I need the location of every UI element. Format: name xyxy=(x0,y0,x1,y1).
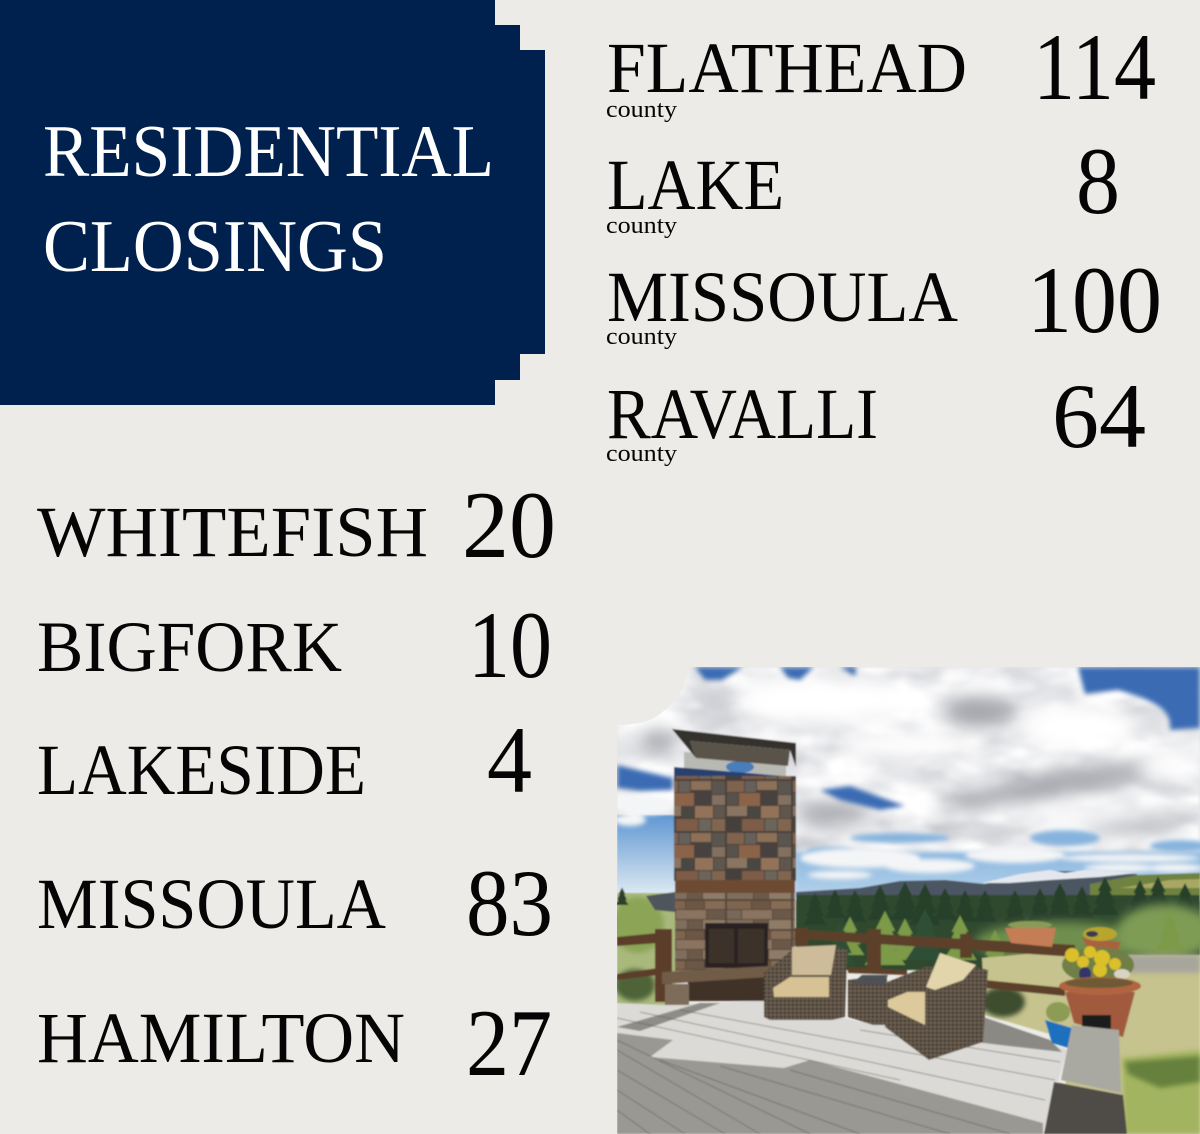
heading: residential closings: RESIDENTIAL xyxy=(43,111,494,193)
row: Missoula: MISSOULA xyxy=(37,864,386,944)
row: Lake county xyxy=(606,128,1120,239)
flower pot on railing xyxy=(1059,946,1141,1037)
panel: title block xyxy=(0,0,545,405)
row: Missoula: 83 xyxy=(466,850,553,956)
panel: county closings list xyxy=(606,14,1162,467)
row: Lake county: LAKE xyxy=(607,145,784,225)
stepped navy panel xyxy=(0,0,545,405)
row: Missoula xyxy=(37,850,553,956)
wooden beam post xyxy=(1044,1025,1127,1134)
row: Hamilton: 27 xyxy=(466,990,552,1096)
row: Lake county: 8 xyxy=(1076,128,1120,234)
blue pot with plant xyxy=(1045,1002,1072,1048)
row: Lakeside xyxy=(37,707,532,813)
row: Bigfork xyxy=(37,592,552,698)
row: Missoula county: county xyxy=(606,324,677,350)
row: Flathead county: county xyxy=(606,97,677,123)
photo: patio with stone fireplace and mountain view xyxy=(610,660,1200,1134)
fireplace chimney xyxy=(662,729,796,1005)
wicker armchair right xyxy=(885,953,988,1060)
row: Missoula county xyxy=(606,247,1162,353)
row: Bigfork: 10 xyxy=(468,592,552,698)
panel: city closings list xyxy=(37,472,556,1096)
row: Ravalli county xyxy=(606,365,1146,467)
heading: residential closings: CLOSINGS xyxy=(43,206,387,288)
row: Whitefish: WHITEFISH xyxy=(37,492,428,572)
row: Ravalli county: county xyxy=(606,441,677,467)
row: Lakeside: LAKESIDE xyxy=(37,730,366,810)
planters on railing xyxy=(1004,920,1122,950)
side table xyxy=(848,975,888,1025)
sky and clouds xyxy=(610,660,1200,900)
row: Hamilton: HAMILTON xyxy=(37,998,405,1078)
forest xyxy=(796,876,1200,970)
row: Lakeside: 4 xyxy=(487,707,532,813)
row: Flathead county: FLATHEAD xyxy=(607,28,967,108)
wicker armchair left xyxy=(764,945,847,1020)
left railing xyxy=(617,929,672,1002)
row: Flathead county: 114 xyxy=(1033,14,1156,120)
row: Whitefish xyxy=(37,472,556,578)
left greenery and distant house xyxy=(612,887,675,1005)
meadow and grass xyxy=(981,950,1200,1134)
distant mountains and hills xyxy=(795,869,1200,896)
row: Lake county: county xyxy=(606,213,677,239)
back railing xyxy=(795,928,1075,996)
row: Hamilton xyxy=(37,990,552,1096)
row: Missoula county: MISSOULA xyxy=(607,257,958,337)
row: Missoula county: 100 xyxy=(1027,247,1162,353)
heading: residential closings xyxy=(43,111,494,288)
row: Bigfork: BIGFORK xyxy=(37,607,342,687)
row: Flathead county xyxy=(606,14,1156,123)
deck xyxy=(617,1000,1067,1134)
row: Ravalli county: RAVALLI xyxy=(607,374,878,454)
row: Whitefish: 20 xyxy=(462,472,556,578)
row: Ravalli county: 64 xyxy=(1052,365,1146,467)
